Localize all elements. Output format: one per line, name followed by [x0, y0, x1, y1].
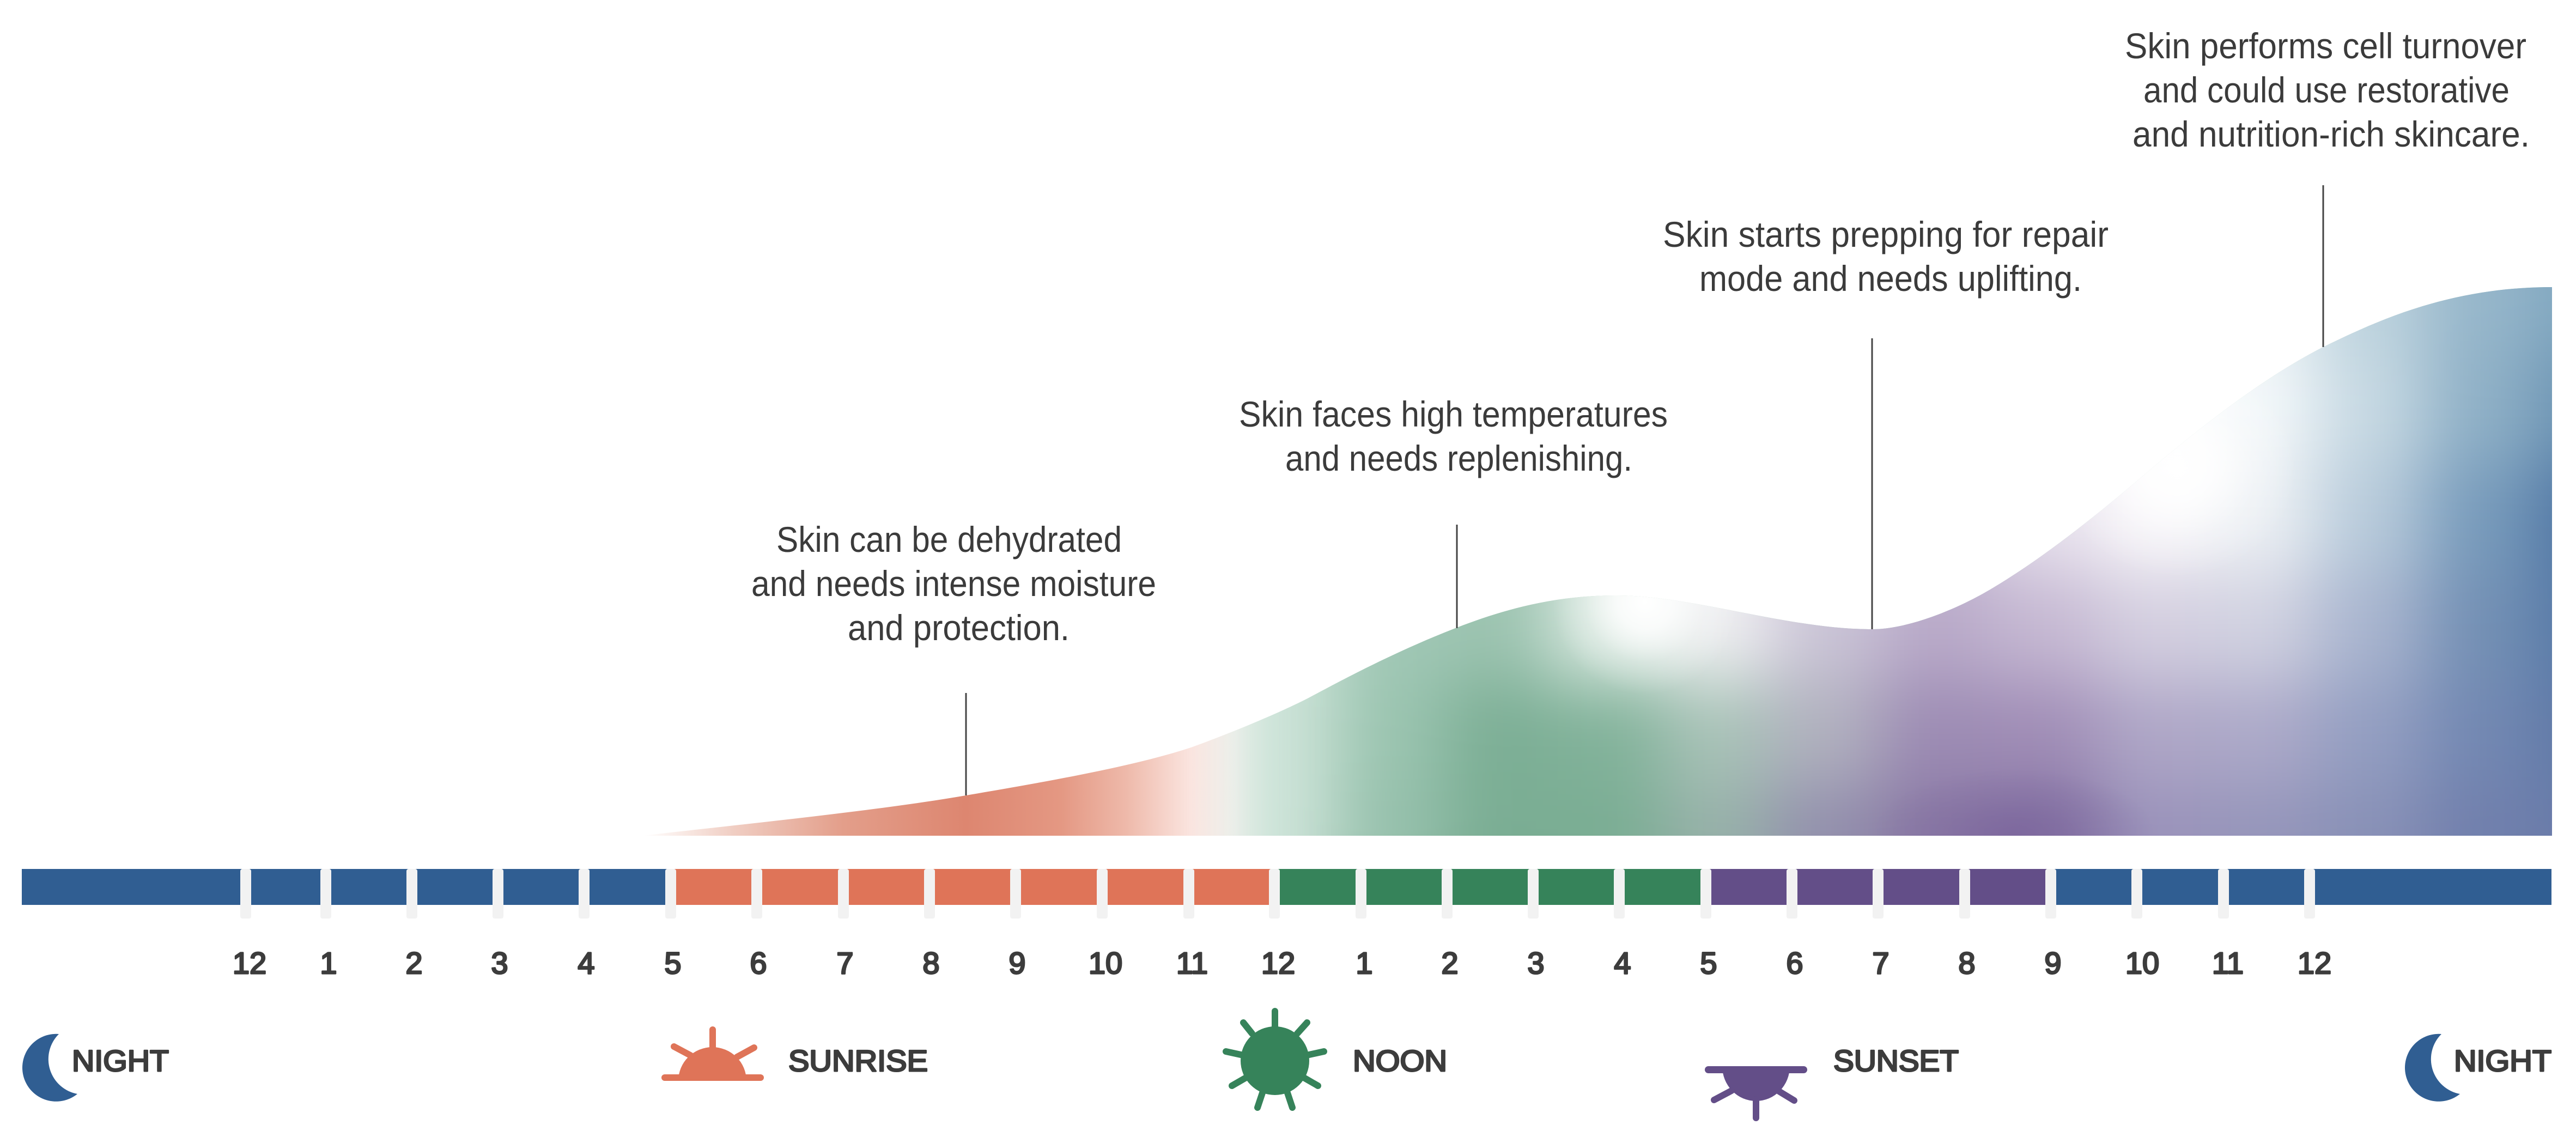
hour labels: 12 — [1261, 946, 1295, 980]
hour labels: 11 — [2212, 946, 2244, 980]
hour labels: 3 — [491, 946, 508, 980]
hour labels: 5 — [1700, 946, 1717, 980]
label: sunset: SUNSET — [1833, 1044, 1959, 1078]
hour labels: 2 — [1441, 946, 1459, 980]
hour labels: 9 — [1008, 946, 1026, 980]
callout: sunrise skin note: and needs intense moisture — [751, 563, 1156, 604]
icon: moon left — [22, 1034, 77, 1102]
label: night right: NIGHT — [2454, 1044, 2551, 1078]
hour labels: 1 — [320, 946, 337, 980]
hour labels: 12 — [233, 946, 266, 980]
label: noon: NOON — [1353, 1044, 1447, 1078]
hour labels: 8 — [1958, 946, 1976, 980]
callout: night skin note — [2125, 26, 2530, 347]
callout: sunset skin note: Skin starts prepping for repair — [1663, 214, 2109, 254]
timeline bar — [22, 869, 2551, 919]
area chart: skin curve with gradient — [655, 287, 2552, 836]
label: sunrise: SUNRISE — [788, 1044, 928, 1078]
hour labels: 5 — [664, 946, 682, 980]
callout: noon skin note: and needs replenishing. — [1285, 438, 1632, 478]
callout: sunrise skin note: Skin can be dehydrated — [776, 519, 1122, 560]
icon: noon sun — [1226, 1011, 1324, 1108]
hour labels: 7 — [836, 946, 854, 980]
icon: moon right — [2405, 1034, 2460, 1102]
hour labels: 11 — [1176, 946, 1208, 980]
hour labels: 10 — [2125, 946, 2159, 980]
hour labels: 10 — [1089, 946, 1122, 980]
hour labels: 4 — [578, 946, 595, 980]
callout: sunrise skin note — [751, 519, 1156, 795]
hour labels — [233, 946, 2331, 980]
hour labels: 8 — [922, 946, 940, 980]
hour labels: 12 — [2298, 946, 2331, 980]
icon: sunrise — [661, 1030, 764, 1081]
callout: sunrise skin note: and protection. — [848, 607, 1070, 648]
hour labels: 4 — [1614, 946, 1631, 980]
hour labels: 3 — [1527, 946, 1545, 980]
callout: night skin note: Skin performs cell turnover — [2125, 26, 2526, 66]
callout: night skin note: and nutrition-rich skincare. — [2133, 114, 2530, 154]
hour labels: 6 — [1786, 946, 1803, 980]
callout: sunset skin note: mode and needs uplifting. — [1699, 258, 2082, 299]
callout: noon skin note: Skin faces high temperatures — [1239, 394, 1668, 434]
callout: night skin note: and could use restorative — [2143, 70, 2510, 110]
hour labels: 6 — [750, 946, 767, 980]
hour labels: 1 — [1356, 946, 1373, 980]
hour labels: 7 — [1872, 946, 1890, 980]
callout: sunset skin note — [1663, 214, 2109, 629]
icon: sunset — [1705, 1066, 1807, 1118]
label: night left: NIGHT — [72, 1044, 169, 1078]
hour labels: 2 — [405, 946, 423, 980]
hour labels: 9 — [2044, 946, 2062, 980]
callout: noon skin note — [1239, 394, 1668, 628]
